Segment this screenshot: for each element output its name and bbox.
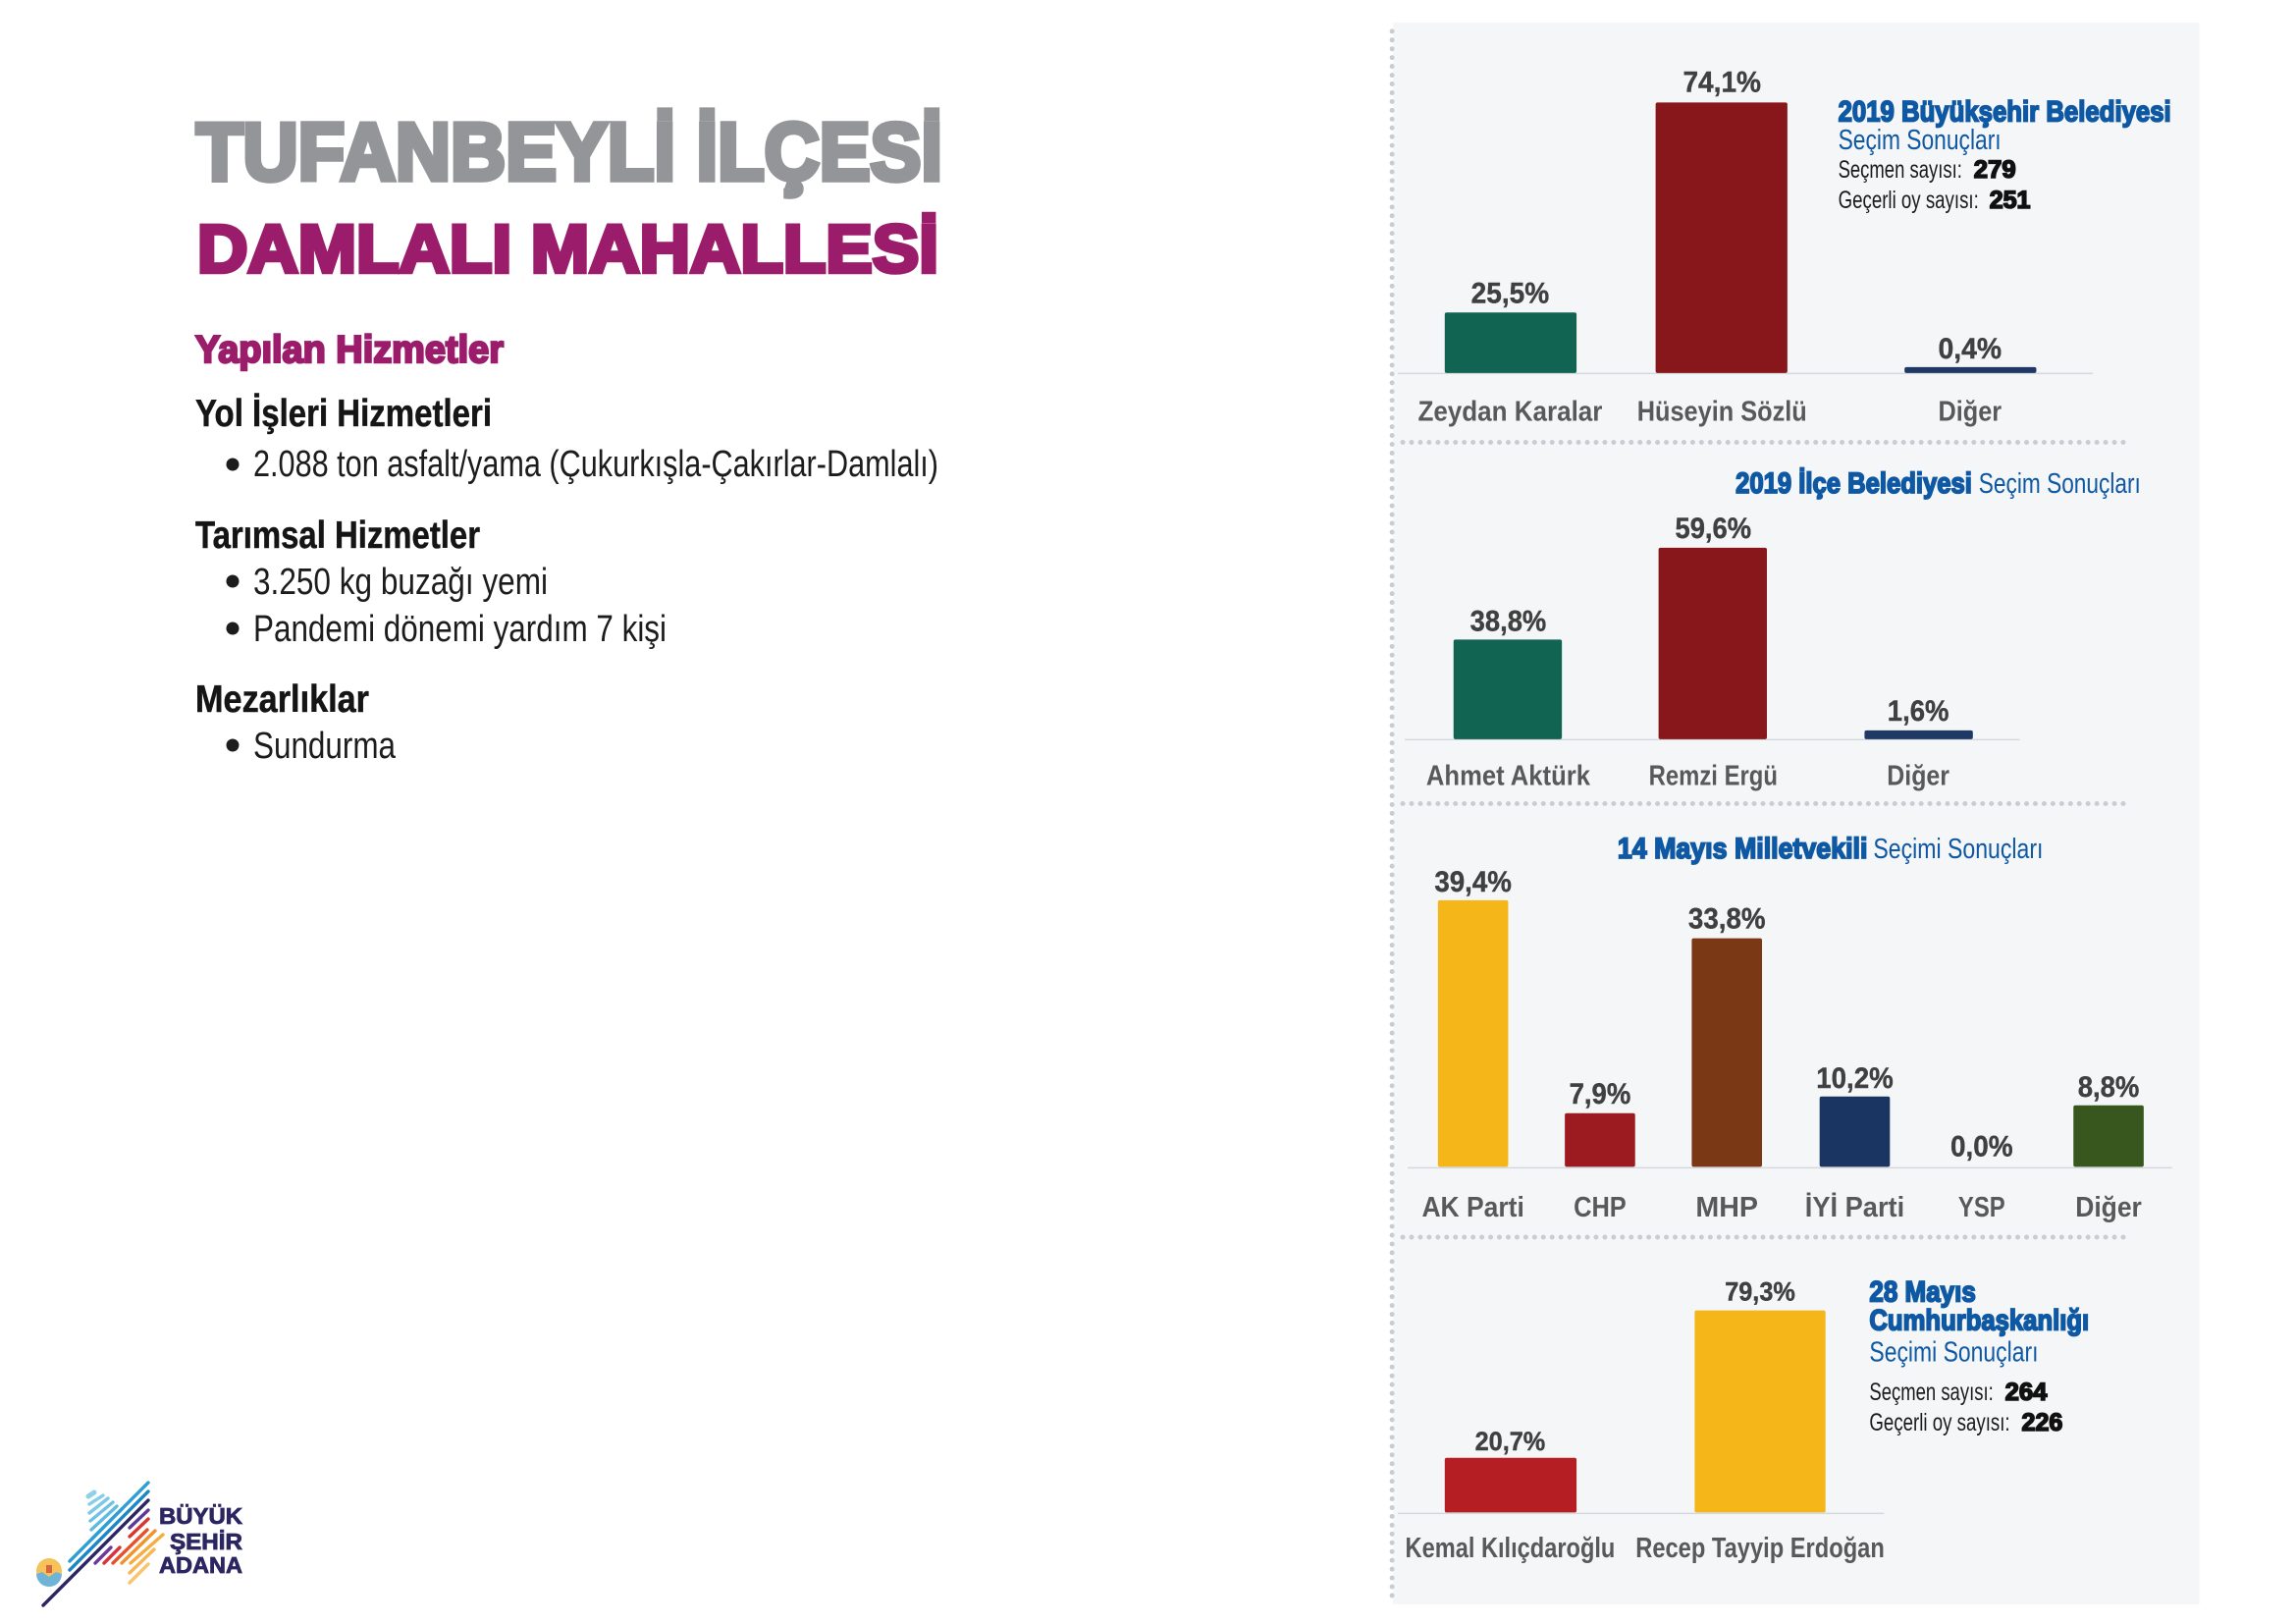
chart heading and counts bbox=[1869, 1276, 2089, 1436]
subheading: road works: Yol İşleri Hizmetleri bbox=[195, 393, 492, 435]
bar: İYİ Parti bbox=[1805, 1062, 1904, 1223]
bar: AK Parti bbox=[1421, 866, 1524, 1223]
bar: MHP bbox=[1688, 903, 1765, 1223]
chart heading and counts: Seçmen sayısı: bbox=[1839, 156, 1962, 184]
chart heading and counts: 279 bbox=[1974, 156, 2016, 184]
list item: shelter: Sundurma bbox=[253, 726, 397, 767]
logo: Büyükşehir Adana bbox=[36, 1483, 242, 1605]
bar: Remzi Ergü: Remzi Ergü bbox=[1649, 761, 1778, 792]
heading: services: Yapılan Hizmetler bbox=[195, 329, 504, 371]
bar: AK Parti: AK Parti bbox=[1421, 1192, 1524, 1223]
title: neighbourhood name: DAMLALI MAHALLESİ bbox=[197, 211, 938, 287]
chart heading and counts bbox=[1839, 95, 2171, 214]
bar: Diğer bbox=[1904, 333, 2036, 428]
bar: Remzi Ergü: 59,6% bbox=[1676, 513, 1751, 545]
chart heading and counts: Seçmen sayısı: bbox=[1869, 1379, 1994, 1406]
chart heading bbox=[1618, 833, 2043, 865]
chart: 2019 metropolitan municipality bbox=[1398, 66, 2171, 428]
bar: Hüseyin Sözlü: 74,1% bbox=[1682, 66, 1761, 98]
title: district name: TUFANBEYLİ İLÇESİ bbox=[196, 106, 942, 197]
list item: feed: 3.250 kg buzağı yemi bbox=[253, 562, 548, 603]
bar: Hüseyin Sözlü: Hüseyin Sözlü bbox=[1637, 397, 1807, 428]
bar: MHP: MHP bbox=[1695, 1192, 1758, 1223]
subheading: cemeteries: Mezarlıklar bbox=[195, 678, 369, 721]
bar: Diğer: Diğer bbox=[2075, 1192, 2142, 1223]
bar: Diğer: Diğer bbox=[1887, 761, 1949, 792]
logo text: BÜYÜK bbox=[159, 1503, 242, 1529]
bar: Zeydan Karalar bbox=[1417, 277, 1602, 428]
bar: İYİ Parti: 10,2% bbox=[1816, 1062, 1894, 1095]
bar: Ahmet Aktürk: Ahmet Aktürk bbox=[1426, 761, 1591, 792]
chart heading and counts: Seçimi Sonuçları bbox=[1869, 1336, 2038, 1368]
chart heading: 14 Mayıs Milletvekili bbox=[1618, 833, 1867, 865]
bar: Diğer: Diğer bbox=[1939, 397, 2002, 428]
bar: Diğer: 1,6% bbox=[1888, 695, 1949, 728]
bar: Kemal Kılıçdaroğlu bbox=[1406, 1427, 1615, 1564]
chart heading: Seçim Sonuçları bbox=[1979, 468, 2141, 500]
bar: YSP bbox=[1950, 1130, 2013, 1223]
bar: İYİ Parti: İYİ Parti bbox=[1805, 1192, 1904, 1223]
bar: CHP: CHP bbox=[1574, 1192, 1627, 1223]
bar: YSP: YSP bbox=[1958, 1192, 2005, 1223]
bar: Diğer: 8,8% bbox=[2078, 1071, 2139, 1104]
chart heading and counts: 251 bbox=[1990, 187, 2031, 214]
bar: Recep Tayyip Erdoğan: 79,3% bbox=[1725, 1277, 1795, 1307]
bar: Recep Tayyip Erdoğan: Recep Tayyip Erdoğan bbox=[1635, 1533, 1885, 1564]
bar: Diğer bbox=[2073, 1071, 2144, 1223]
bar: Diğer: 0,4% bbox=[1939, 333, 2002, 365]
chart heading and counts: Seçim Sonuçları bbox=[1839, 125, 2002, 156]
bar: MHP: 33,8% bbox=[1688, 903, 1765, 936]
chart heading and counts: Geçerli oy sayısı: bbox=[1869, 1409, 2010, 1436]
bar: Zeydan Karalar: 25,5% bbox=[1471, 277, 1549, 309]
chart heading and counts: Geçerli oy sayısı: bbox=[1839, 187, 1979, 214]
bar: Ahmet Aktürk: 38,8% bbox=[1470, 605, 1546, 637]
bar: AK Parti: 39,4% bbox=[1434, 866, 1512, 898]
panel: election results bbox=[1392, 23, 2200, 1604]
logo text: ŞEHİR bbox=[170, 1529, 242, 1554]
bar: Kemal Kılıçdaroğlu: 20,7% bbox=[1475, 1427, 1545, 1456]
chart heading: Seçimi Sonuçları bbox=[1873, 834, 2043, 865]
bar: YSP: 0,0% bbox=[1950, 1130, 2013, 1163]
bar: Zeydan Karalar: Zeydan Karalar bbox=[1417, 397, 1602, 428]
bar: Kemal Kılıçdaroğlu: Kemal Kılıçdaroğlu bbox=[1406, 1533, 1615, 1564]
chart: 28 May presidential election bbox=[1398, 1276, 2089, 1564]
chart: 14 May parliamentary election bbox=[1408, 833, 2172, 1223]
list item: asphalt: 2.088 ton asfalt/yama (Çukurkışla-Çakırlar-Damlalı) bbox=[253, 444, 938, 485]
logo text bbox=[159, 1503, 242, 1578]
chart heading and counts: 264 bbox=[2005, 1379, 2048, 1406]
chart heading and counts: 28 Mayıs bbox=[1869, 1276, 1976, 1309]
chart heading and counts: 2019 Büyükşehir Belediyesi bbox=[1839, 95, 2171, 128]
bar: CHP: 7,9% bbox=[1570, 1078, 1630, 1110]
icon: municipal seal bbox=[36, 1558, 62, 1587]
subheading: agriculture: Tarımsal Hizmetler bbox=[195, 514, 480, 557]
chart: 2019 district municipality bbox=[1405, 467, 2141, 792]
chart heading and counts: 226 bbox=[2022, 1409, 2062, 1436]
panel: services list bbox=[195, 329, 938, 767]
bar: Ahmet Aktürk bbox=[1426, 605, 1591, 792]
bar: Diğer bbox=[1864, 695, 1973, 792]
chart heading: 2019 İlçe Belediyesi bbox=[1735, 467, 1972, 500]
bar: Remzi Ergü bbox=[1649, 513, 1778, 792]
bar: Hüseyin Sözlü bbox=[1637, 66, 1807, 428]
list item: pandemic aid: Pandemi dönemi yardım 7 kişi bbox=[253, 609, 667, 650]
bar: CHP bbox=[1565, 1078, 1635, 1223]
chart heading and counts: Cumhurbaşkanlığı bbox=[1869, 1304, 2089, 1336]
logo text: ADANA bbox=[159, 1552, 242, 1578]
bar: Recep Tayyip Erdoğan bbox=[1635, 1277, 1885, 1564]
chart heading bbox=[1735, 467, 2141, 500]
